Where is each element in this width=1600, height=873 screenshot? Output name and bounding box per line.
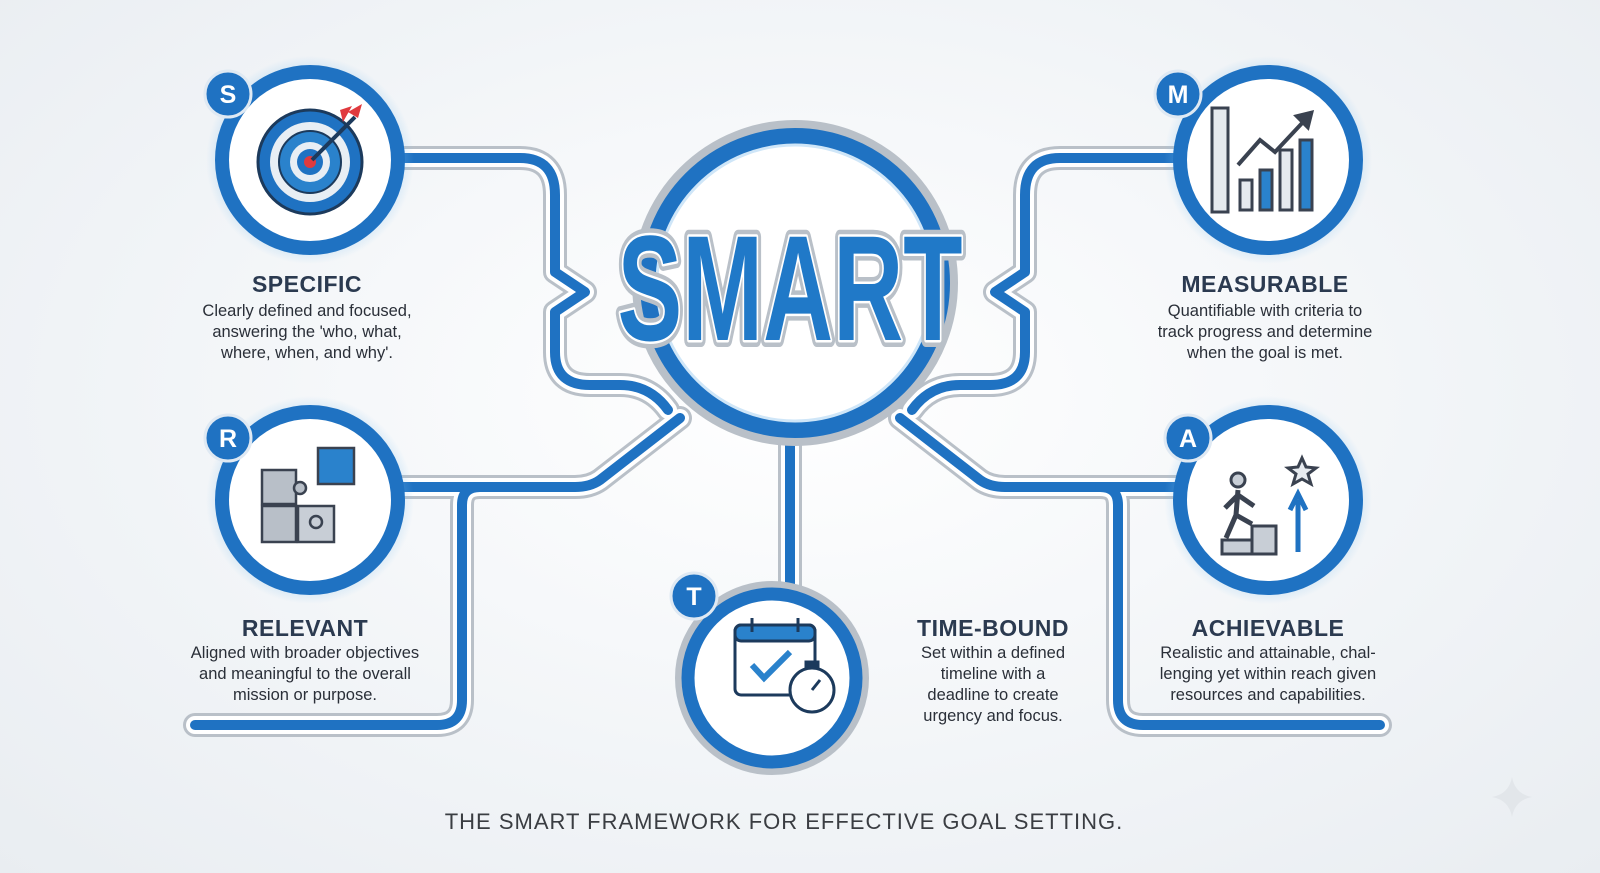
- text: measurable: Quantifiable with criteria to: [1168, 302, 1362, 320]
- text: specific: [202, 302, 412, 362]
- badge S: S: [220, 81, 236, 109]
- text: measurable: when the goal is met.: [1187, 344, 1343, 362]
- badge T: [671, 573, 717, 619]
- text: specific: where, when, and why'.: [221, 344, 393, 362]
- badge A: A: [1179, 425, 1197, 453]
- badge R: [205, 415, 251, 461]
- text: specific: Clearly defined and focused,: [202, 302, 412, 320]
- central circle: [637, 125, 953, 441]
- text: relevant: mission or purpose.: [233, 686, 377, 704]
- icon: climber: [1222, 458, 1316, 554]
- SMART title: SMART: [618, 204, 962, 372]
- badge M: [1155, 71, 1201, 117]
- icon: calendar stopwatch: [735, 618, 834, 712]
- badge A: [1165, 415, 1211, 461]
- text: achievable: lenging yet within reach given: [1160, 665, 1376, 683]
- text: specific: answering the 'who, what,: [212, 323, 402, 341]
- icon: target: [258, 104, 362, 214]
- icon: chart: [1212, 108, 1312, 212]
- badge S: [205, 71, 251, 117]
- icon: puzzle: [262, 448, 354, 542]
- text: achievable: resources and capabilities.: [1170, 686, 1366, 704]
- connectors: [195, 158, 1380, 725]
- badge R: R: [219, 425, 237, 453]
- heading: specific: SPECIFIC: [252, 271, 362, 297]
- SMART title: [618, 204, 962, 372]
- node R: [205, 396, 414, 604]
- badge M: M: [1168, 81, 1188, 109]
- badge T: T: [686, 583, 702, 611]
- text: time-bound: Set within a defined: [921, 644, 1065, 662]
- SMART title: SMART: [618, 204, 962, 372]
- footer caption: THE SMART FRAMEWORK FOR EFFECTIVE GOAL SETTING.: [445, 809, 1123, 834]
- text: relevant: Aligned with broader objectives: [191, 644, 419, 662]
- text: time-bound: [921, 644, 1065, 725]
- heading: relevant: RELEVANT: [242, 615, 368, 641]
- text: relevant: [190, 644, 419, 704]
- text: time-bound: urgency and focus.: [923, 707, 1063, 725]
- heading: measurable: MEASURABLE: [1181, 271, 1349, 297]
- text: achievable: Realistic and attainable, chal-: [1160, 644, 1376, 662]
- text: relevant: and meaningful to the overall: [199, 665, 411, 683]
- heading: achievable: ACHIEVABLE: [1192, 615, 1344, 641]
- node M: [1155, 56, 1372, 264]
- node T: [671, 573, 870, 776]
- icon: sparkle: [1494, 778, 1530, 816]
- text: time-bound: deadline to create: [927, 686, 1059, 704]
- heading: time-bound: TIME-BOUND: [917, 615, 1069, 641]
- node S: [205, 56, 414, 264]
- text: measurable: track progress and determine: [1158, 323, 1372, 341]
- text: measurable: [1158, 302, 1372, 362]
- node A: [1164, 396, 1372, 604]
- text: time-bound: timeline with a: [941, 665, 1045, 683]
- text: achievable: [1160, 644, 1376, 704]
